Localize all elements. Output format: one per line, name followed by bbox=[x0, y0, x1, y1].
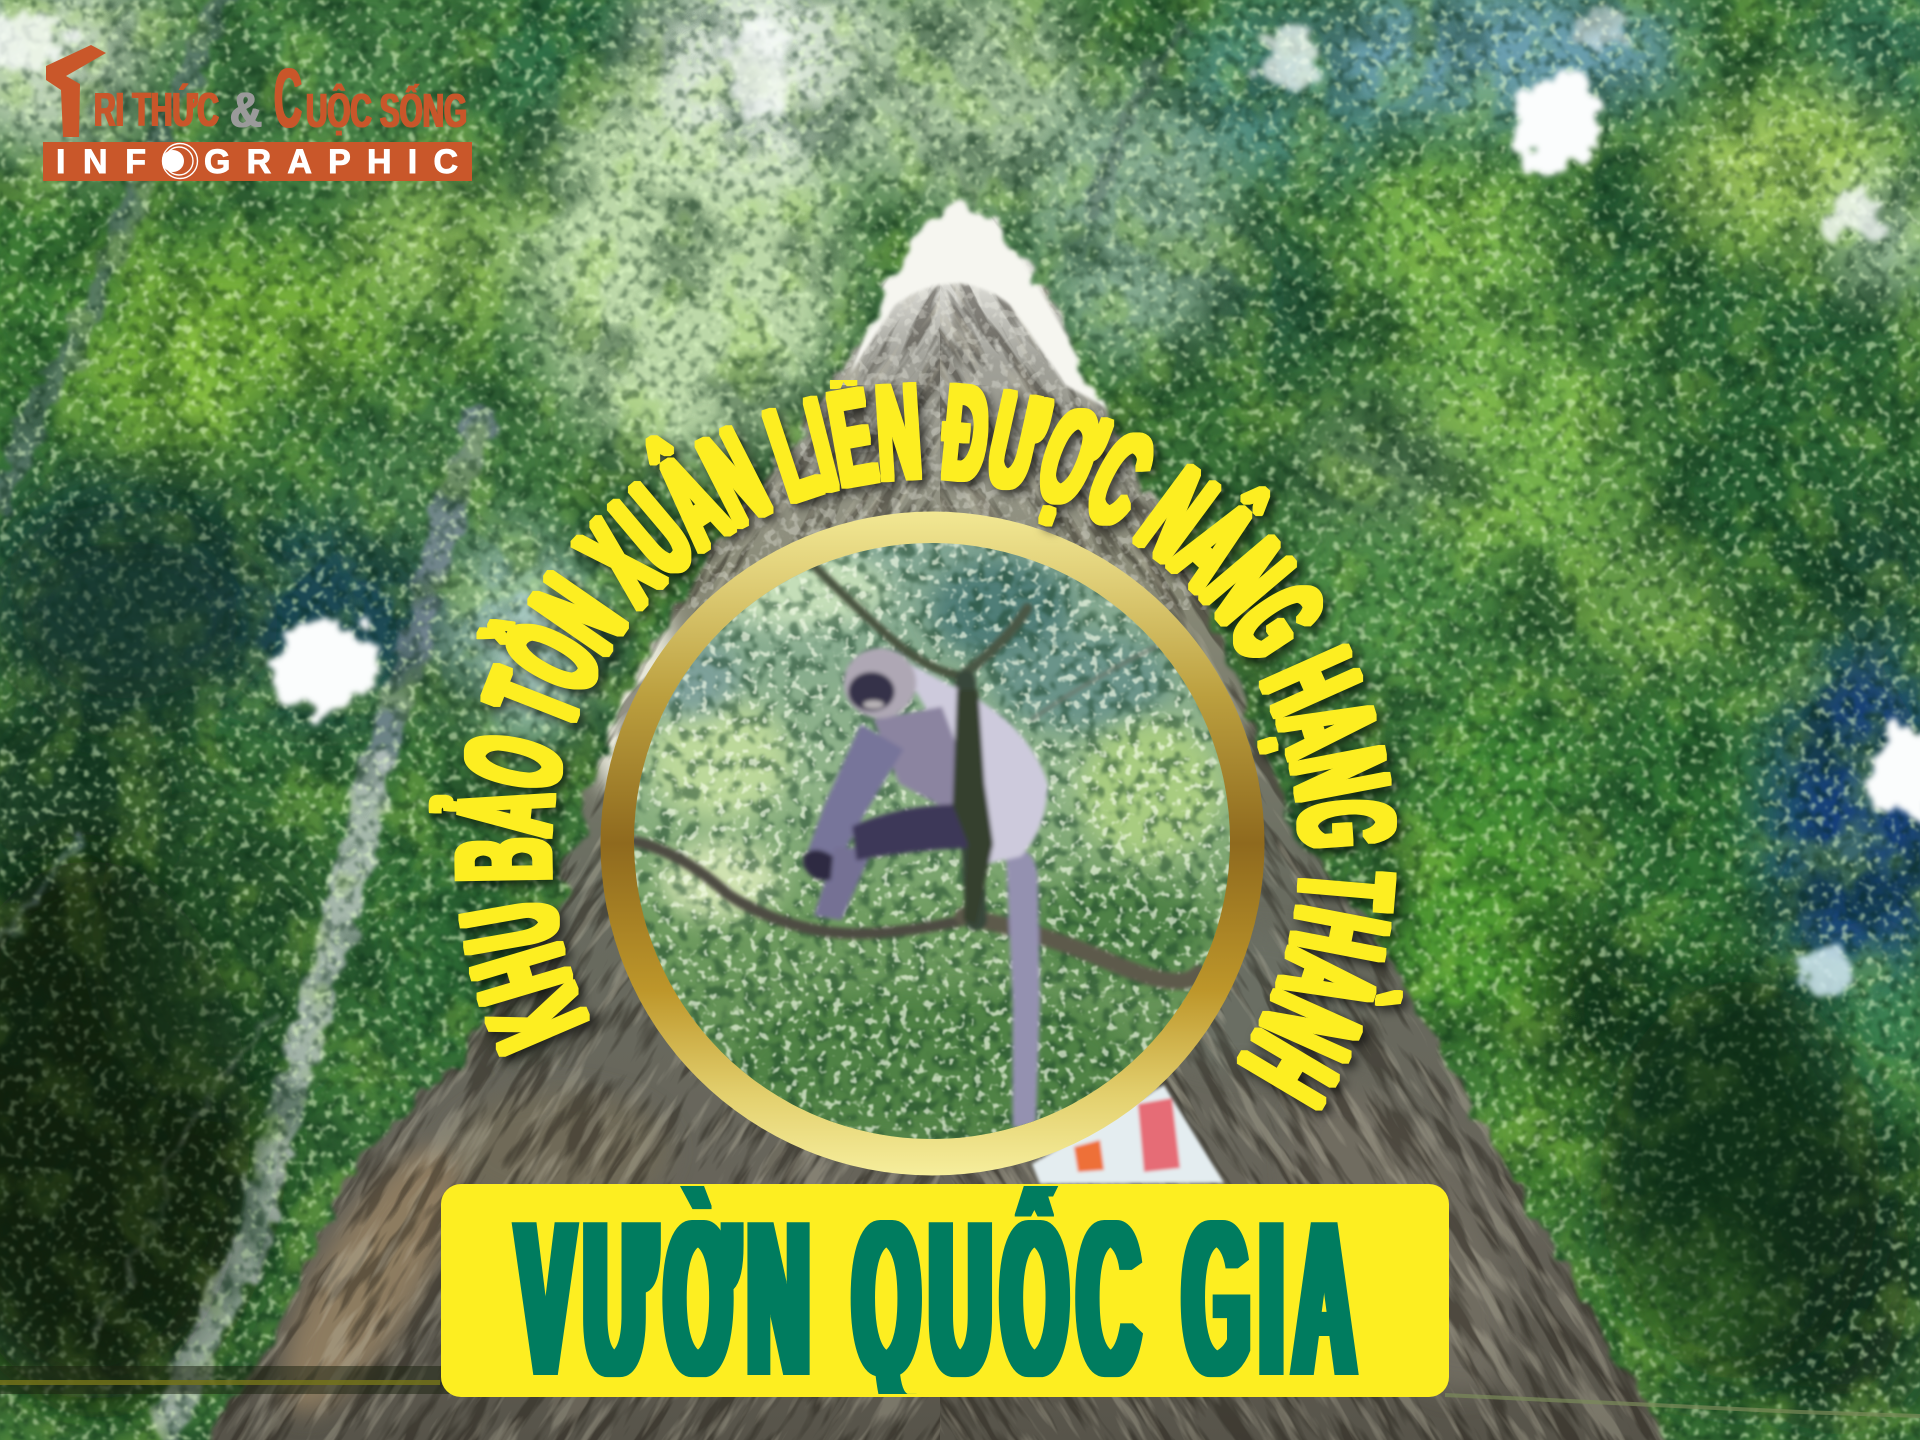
monkey arm bbox=[805, 724, 903, 869]
medallion photo: langur monkey on a branch bbox=[630, 540, 1240, 1150]
monkey hand bbox=[803, 850, 833, 880]
logo: Trí Thức & Cuộc Sống Infographic bbox=[43, 45, 472, 181]
monkey lower leg bbox=[814, 848, 874, 920]
logo wordmark: C bbox=[274, 51, 302, 145]
logo bar text bbox=[56, 143, 458, 181]
monkey back and rump bbox=[895, 655, 1048, 865]
sky gaps bbox=[0, 10, 1920, 990]
logo bar text: GRAPHIC bbox=[204, 143, 458, 181]
side tree trunks bbox=[0, 0, 1180, 1424]
branches bbox=[634, 566, 1198, 981]
trunk in front of monkey bbox=[953, 690, 993, 925]
main tree trunk bbox=[208, 196, 1666, 1440]
logo wordmark: & bbox=[230, 82, 262, 138]
monkey thigh bbox=[852, 804, 993, 860]
logo bar text: INF bbox=[56, 143, 146, 181]
curved title: Khu bảo tồn Xuân Liên được nâng hạng thành: KHU BẢO TỒN XUÂN LIÊN ĐƯỢC NÂNG HẠNG THÀNH bbox=[428, 380, 1413, 1120]
monkey and branches drawn in zoomed coordinates bbox=[634, 566, 1198, 1128]
gold ring medallion bbox=[600, 512, 1264, 1176]
logo bar bbox=[43, 142, 472, 181]
logo wordmark bbox=[94, 51, 467, 145]
logo wordmark: UỘC SỐNG bbox=[306, 83, 467, 138]
paper sign on trunk bbox=[1032, 1085, 1224, 1184]
yellow banner bbox=[441, 1175, 1449, 1423]
logo wordmark: RI THỨC bbox=[94, 82, 219, 137]
bottom horizontal line bbox=[0, 1366, 1920, 1416]
logo swirl icon bbox=[162, 144, 198, 178]
monkey torso bbox=[874, 707, 968, 813]
monkey head fur bbox=[844, 648, 916, 718]
monkey tail bbox=[1006, 851, 1040, 1128]
logo icon: roof-shaped T bbox=[46, 45, 106, 137]
monkey face bbox=[848, 672, 894, 711]
